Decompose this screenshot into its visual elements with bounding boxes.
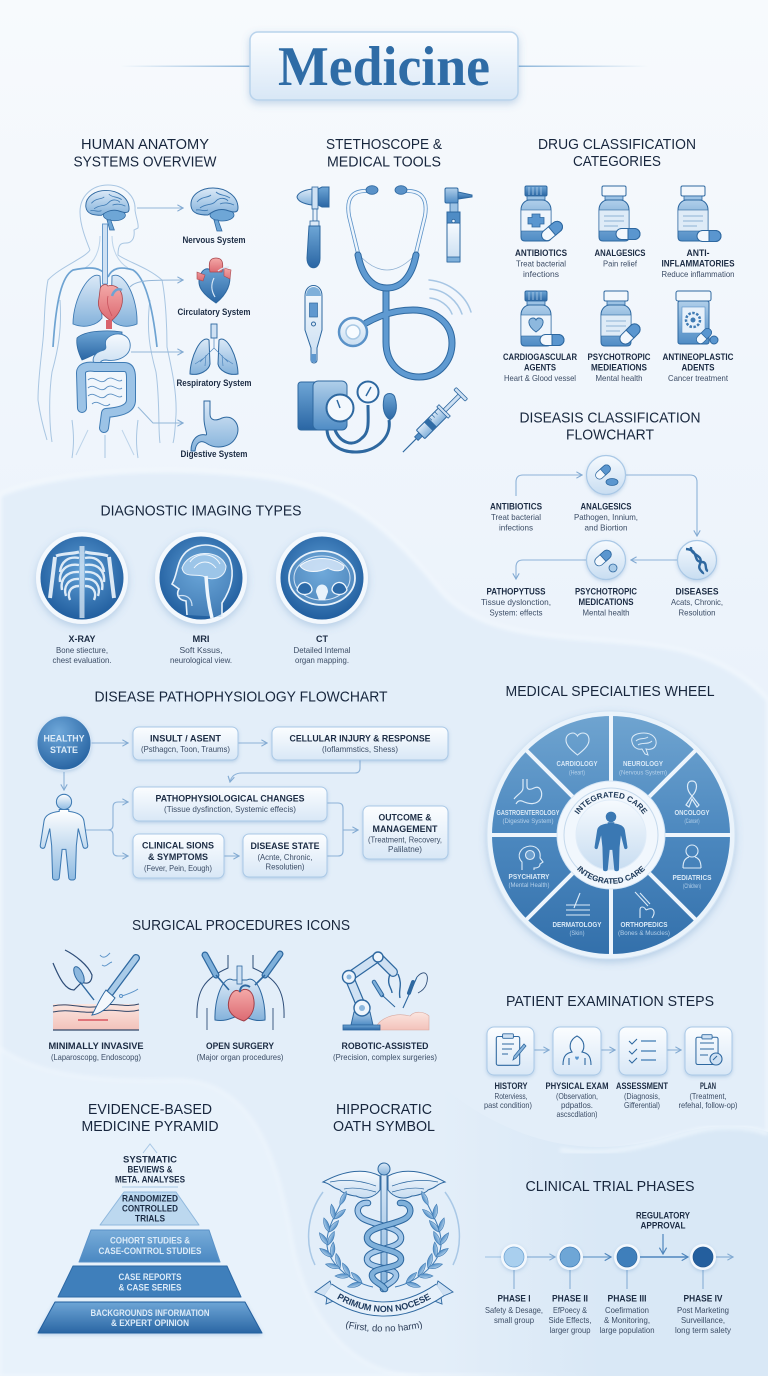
panel: hippocratic oath — [308, 1101, 460, 1332]
heading: disease classification: DISEASIS CLASSIFICATION — [520, 410, 700, 426]
icon: cardiovascular bottle — [521, 291, 564, 346]
wheel disc — [487, 711, 735, 959]
arrows: pathophysiology flow — [64, 743, 360, 856]
label: psychotropic: PSYCHOTROPIC — [575, 586, 638, 596]
label: psychotropic: Mental health — [582, 608, 630, 618]
box: disease state — [243, 834, 327, 877]
box: clinical signs: CLINICAL SIONS — [142, 840, 214, 852]
box: insult: INSULT / ASENT — [150, 734, 221, 744]
organ: colon — [81, 367, 131, 428]
label: history: Roterviess, — [494, 1091, 528, 1101]
label: phase IV: long term salety — [675, 1325, 732, 1335]
segment: pediatrics — [672, 845, 712, 890]
label: antineoplastic: Cancer treatment — [668, 373, 729, 383]
segment: gastroenterology: GASTROENTEROLOGY — [496, 808, 560, 817]
box: outcome: Palilatne) — [388, 844, 422, 854]
label: diseases: DISEASES — [676, 586, 719, 596]
card: assessment — [619, 1027, 667, 1075]
heading: pyramid: MEDICINE PYRAMID — [82, 1118, 219, 1135]
symbol: serpents — [358, 1203, 410, 1289]
panel: human anatomy — [38, 136, 252, 459]
label: physical exam: ascscdlation) — [556, 1109, 598, 1119]
pyramid level: randomized trials: CONTROLLED — [122, 1204, 178, 1214]
icon: thermometer — [305, 286, 322, 363]
label: robotic assisted: (Precision, complex surgeries) — [333, 1052, 437, 1062]
label: pathophysiology: PATHOPYTUSS — [486, 586, 546, 596]
arrows: anatomy — [130, 208, 183, 423]
box: clinical signs — [133, 834, 224, 878]
panel: surgical procedures — [48, 917, 437, 1062]
label: antibiotics: ANTIBIOTICS — [515, 248, 567, 258]
label: circulatory: Circulatory System — [178, 307, 251, 317]
node: healthy state: HEALTHY — [44, 734, 85, 744]
box: disease state: DISEASE STATE — [250, 841, 320, 852]
icon: ct — [276, 532, 368, 624]
label: phase II: PHASE II — [552, 1294, 588, 1304]
label: anti-inflammatories: INFLAMMATORIES — [662, 258, 735, 268]
label: phase III: large population — [600, 1325, 655, 1335]
symbol: left laurel — [318, 1190, 373, 1289]
heading: disease classification: FLOWCHART — [566, 426, 654, 444]
box: outcome: MANAGEMENT — [372, 824, 438, 835]
label: open surgery: OPEN SURGERY — [206, 1041, 274, 1051]
organ: small intestine — [88, 378, 122, 406]
icon: pill node — [586, 540, 626, 580]
icon: sound waves — [429, 280, 471, 314]
box: pathophysiological changes: PATHOPHYSIOLOGICAL CHANGES — [156, 794, 304, 804]
symbol: right laurel — [395, 1190, 450, 1289]
icon: antineoplastic bottle — [676, 291, 718, 345]
label: cardiovascular: Heart & Glood vessel — [504, 373, 576, 383]
label: phase II: Side Effects, — [548, 1315, 592, 1325]
label: psychotropic: Mental health — [596, 373, 643, 383]
label: plan: PLAN — [700, 1081, 716, 1091]
label: phase III: PHASE III — [608, 1294, 646, 1304]
heading: trials: CLINICAL TRIAL PHASES — [526, 1178, 694, 1195]
box: clinical signs: (Fever, Pein, Eough) — [144, 863, 212, 873]
label: digestive: Digestive System — [180, 449, 248, 459]
box: cellular injury: (Ioflammstics, Shess) — [322, 744, 398, 754]
symbol: outer arcs — [309, 1192, 459, 1265]
segment: neurology: NEUROLOGY — [623, 759, 663, 768]
heading: examination: PATIENT EXAMINATION STEPS — [506, 993, 714, 1010]
label: ct: organ mapping. — [295, 655, 349, 665]
icon: syringe — [397, 387, 468, 458]
node: healthy state — [37, 716, 91, 770]
heading: surgical: SURGICAL PROCEDURES ICONS — [132, 917, 350, 934]
label: pathophysiology: System: effects — [490, 608, 542, 618]
pyramid level: case reports — [58, 1266, 241, 1297]
label: analgesics: ANALGESICS — [594, 248, 646, 258]
label: mri: MRI — [192, 634, 210, 644]
icon: analgesics bottle — [599, 186, 640, 241]
title banner — [120, 32, 648, 100]
organ: body heart — [98, 285, 122, 329]
pyramid apex — [115, 1144, 185, 1187]
box: cellular injury: CELLULAR INJURY & RESPONSE — [290, 734, 430, 744]
segment: dermatology — [552, 893, 602, 937]
label: x-ray: chest evaluation. — [52, 655, 112, 665]
symbol: staff — [378, 1163, 390, 1290]
label: diseases: Acats, Chronic, — [671, 597, 723, 607]
center text: integrated care: INTEGRATED CARE — [574, 792, 648, 814]
label: minimally invasive: (Laparoscopg, Endoscopg) — [51, 1052, 141, 1062]
label: anti-inflammatories: Reduce inflammation — [662, 269, 735, 279]
label: phase III: & Monitoring, — [604, 1315, 650, 1325]
icon: respiratory lungs — [190, 324, 238, 374]
label: regulatory approval: APPROVAL — [640, 1220, 686, 1230]
pyramid apex: SYSTMATIC — [123, 1154, 178, 1164]
panel: stethoscope and tools — [297, 136, 472, 458]
node: phase IV — [690, 1244, 716, 1270]
pyramid level: cohort studies: COHORT STUDIES & — [110, 1236, 191, 1246]
segment: cardiology — [556, 733, 598, 776]
label: analgesics: and Biortion — [584, 522, 628, 532]
timeline arrows — [485, 1257, 733, 1289]
icon: circulatory heart — [197, 258, 231, 303]
organ: body lungs — [73, 275, 137, 326]
label: analgesics: Pathogen, Innium, — [574, 512, 638, 522]
box: insult: (Psthagcn, Toon, Traums) — [141, 744, 230, 754]
label: assessment: Gifferential) — [624, 1100, 660, 1110]
segment: dermatology: DERMATOLOGY — [552, 920, 602, 929]
label: antibiotics: infections — [499, 522, 533, 532]
heading: anatomy: HUMAN ANATOMY — [81, 136, 209, 153]
label: assessment: ASSESSMENT — [616, 1081, 669, 1091]
label: antibiotics: Treat bacterial — [516, 258, 566, 268]
label: diseases: Resolution — [678, 608, 716, 618]
center person — [594, 812, 628, 871]
label: phase IV: PHASE IV — [684, 1294, 723, 1304]
label: ct: CT — [316, 634, 329, 644]
heading: pathophysiology: DISEASE PATHOPHYSIOLOGY FLOWCHART — [94, 688, 388, 706]
icon: antibiotics bottle — [521, 186, 565, 243]
center text lower: integrated care: INTEGRATED CARE — [577, 866, 646, 884]
label: phase II: EfPoecy & — [553, 1305, 587, 1315]
pyramid level: case reports: CASE REPORTS — [118, 1272, 182, 1282]
pyramid level: randomized trials — [100, 1192, 199, 1225]
pyramid level: randomized trials: RANDOMIZED — [122, 1194, 178, 1204]
panel: diagnostic imaging — [36, 502, 368, 665]
label: history: HISTORY — [494, 1081, 528, 1091]
heading: anatomy: SYSTEMS OVERVIEW — [74, 154, 217, 170]
icon: otoscope — [445, 188, 472, 262]
label: physical exam: pdpatlos. — [561, 1100, 593, 1110]
segment: gastroenterology — [496, 779, 560, 825]
segment: dermatology: (Skin) — [570, 930, 584, 937]
organ: stomach — [93, 334, 130, 369]
card: physical exam — [553, 1027, 601, 1075]
arrows: classification flow — [516, 475, 697, 579]
label: nervous: Nervous System — [182, 235, 246, 245]
label: anti-inflammatories: ANTI- — [686, 248, 710, 258]
ribbon text: PRIMUM NON NOCESE — [337, 1293, 431, 1312]
panel: patient examination — [484, 993, 738, 1119]
box: disease state: Resolutien) — [266, 862, 305, 872]
segment: gastroenterology: (Digestive System) — [502, 818, 554, 825]
organ: body brain — [86, 190, 129, 230]
label: x-ray: X-RAY — [68, 634, 96, 644]
box: cellular injury — [272, 727, 448, 760]
icon: reflex hammer — [297, 187, 329, 268]
label: antibiotics: Treat bacterial — [491, 512, 541, 522]
label: cardiovascular: CARDIOGASCULAR — [503, 352, 578, 362]
symbol: ribbon — [315, 1281, 453, 1309]
label: psychotropic: MEDICATIONS — [578, 597, 634, 607]
label: psychotropic: PSYCHOTROPIC — [588, 352, 651, 362]
label: respiratory: Respiratory System — [176, 378, 252, 388]
heading: drugs: DRUG CLASSIFICATION — [538, 136, 696, 153]
icon: mri — [155, 532, 247, 624]
label: phase II: larger group — [550, 1325, 591, 1335]
body outline — [38, 185, 176, 458]
box: outcome: (Treatment, Recovery, — [368, 834, 442, 844]
pyramid level: cohort studies — [79, 1230, 220, 1262]
label: phase I: PHASE I — [498, 1294, 530, 1304]
card: plan — [685, 1027, 732, 1075]
pyramid level: background information: BACKGROUNDS INFORMATION — [90, 1308, 210, 1318]
segment: oncology — [674, 781, 710, 825]
heading: tools: STETHOSCOPE & — [326, 136, 442, 153]
label: physical exam: (Observation, — [556, 1091, 598, 1101]
panel: specialties wheel — [483, 683, 739, 966]
node: phase II — [557, 1244, 583, 1270]
icon: capsule node — [586, 456, 626, 494]
label: physical exam: PHYSICAL EXAM — [546, 1081, 608, 1091]
label: analgesics: ANALGESICS — [580, 502, 632, 512]
segment: orthopedics — [618, 892, 670, 937]
segment: psychiatry — [508, 846, 550, 889]
icon: blood pressure cuff — [298, 381, 396, 452]
pyramid level: case reports: & CASE SERIES — [118, 1282, 182, 1292]
label: mri: Soft Kssus, — [180, 645, 222, 655]
heading: imaging: DIAGNOSTIC IMAGING TYPES — [100, 502, 302, 520]
organ: spinal cord — [102, 224, 108, 284]
label: ct: Detailed Intemal — [294, 645, 351, 655]
label: phase III: Coefirmation — [605, 1305, 649, 1315]
box: pathophysiological changes: (Tissue dysfinction, Systemic effecis) — [164, 804, 296, 814]
box: outcome: OUTCOME & — [378, 812, 432, 824]
pyramid level: randomized trials: TRIALS — [135, 1214, 165, 1224]
arrow: approval — [662, 1234, 664, 1254]
segment: oncology: ONCOLOGY — [674, 808, 710, 817]
icon: psychotropic bottle — [601, 291, 642, 346]
label: minimally invasive: MINIMALLY INVASIVE — [48, 1041, 144, 1051]
label: antibiotics: infections — [523, 269, 559, 279]
heading: pyramid: EVIDENCE-BASED — [88, 1101, 212, 1118]
title banner: Medicine — [278, 36, 490, 98]
icon: x-ray — [36, 532, 128, 624]
label: phase IV: Surveillance, — [681, 1315, 725, 1325]
label: history: past condition) — [484, 1100, 532, 1110]
icon: dna node — [678, 540, 716, 580]
organ: liver — [77, 331, 122, 360]
icon: stethoscope — [339, 186, 452, 377]
label: plan: refehal, follow-op) — [678, 1100, 738, 1110]
heading: hippocratic: OATH SYMBOL — [333, 1118, 435, 1135]
label: phase I: Safety & Desage, — [485, 1305, 543, 1315]
card: history — [487, 1027, 534, 1075]
icon: nervous system — [191, 188, 238, 231]
label: regulatory approval: REGULATORY — [636, 1210, 690, 1220]
segment: oncology: (Cancer) — [684, 818, 700, 825]
segment: orthopedics: (Bones & Muscles) — [618, 930, 670, 937]
heading: tools: MEDICAL TOOLS — [327, 154, 441, 170]
panel: evidence pyramid — [38, 1101, 262, 1333]
box: outcome — [363, 806, 448, 859]
panel: clinical trial phases — [485, 1178, 733, 1335]
heading: drugs: CATEGORIES — [573, 153, 661, 170]
label: plan: (Treatment, — [690, 1091, 726, 1101]
segment: psychiatry: PSYCHIATRY — [508, 872, 550, 881]
segment: orthopedics: ORTHOPEDICS — [620, 920, 668, 929]
box: pathophysiological changes — [133, 787, 327, 821]
icon: open surgery — [197, 954, 284, 1030]
node: phase I — [501, 1244, 527, 1270]
segment: cardiology: (Heart) — [569, 770, 585, 776]
label: phase IV: Post Marketing — [677, 1305, 729, 1315]
label: analgesics: Pain relief — [603, 258, 638, 268]
panel: drug classification — [503, 136, 735, 383]
heading: wheel: MEDICAL SPECIALTIES WHEEL — [506, 683, 714, 700]
label: pathophysiology: Tissue dyslonction, — [481, 597, 551, 607]
label: antineoplastic: ANTINEOPLASTIC — [662, 352, 734, 362]
label: antineoplastic: ADENTS — [682, 362, 715, 372]
segment: psychiatry: (Mental Health) — [508, 882, 550, 889]
panel: disease classification flowchart — [481, 410, 723, 618]
box: clinical signs: & SYMPTOMS — [148, 852, 208, 863]
label: robotic assisted: ROBOTIC-ASSISTED — [342, 1041, 428, 1051]
icon: person outline — [40, 794, 88, 880]
caption: first do no harm: (First, do no harm) — [346, 1321, 422, 1332]
segment: pediatrics: (Children) — [683, 883, 701, 890]
segment: pediatrics: PEDIATRICS — [672, 873, 712, 882]
arrows: examination flow — [534, 1049, 681, 1051]
pyramid apex: META. ANALYSES — [115, 1174, 185, 1184]
label: phase I: small group — [494, 1315, 534, 1325]
label: psychotropic: MEDIEATIONS — [591, 362, 647, 372]
pyramid level: background information: & EXPERT OPINION — [111, 1318, 189, 1328]
heading: hippocratic: HIPPOCRATIC — [336, 1101, 432, 1118]
icon: robotic assisted — [342, 952, 429, 1030]
node: healthy state: STATE — [50, 745, 78, 755]
node: phase III — [614, 1244, 640, 1270]
box: disease state: (Acnte, Chronic, — [258, 852, 312, 862]
label: mri: neurological view. — [170, 655, 232, 665]
segment: neurology: (Nervous System) — [619, 770, 667, 776]
organ: vessels — [53, 268, 157, 347]
panel: pathophysiology flowchart — [37, 688, 448, 880]
label: cardiovascular: AGENTS — [524, 362, 556, 372]
icon: digestive stomach — [191, 401, 238, 451]
label: assessment: (Diagnosis, — [624, 1091, 660, 1101]
segment: neurology — [619, 733, 667, 776]
icon: minimally invasive — [53, 950, 139, 1030]
segment: cardiology: CARDIOLOGY — [556, 759, 598, 768]
label: x-ray: Bone stiecture, — [56, 645, 108, 655]
pyramid level: cohort studies: CASE-CONTROL STUDIES — [98, 1246, 202, 1256]
icon: anti-inflammatory bottle — [678, 186, 721, 242]
box: insult — [133, 727, 238, 760]
pyramid apex: BEVIEWS & — [128, 1164, 173, 1174]
symbol: wings — [323, 1171, 445, 1198]
label: antibiotics: ANTIBIOTICS — [490, 502, 542, 512]
pyramid level: background information — [38, 1302, 262, 1333]
label: open surgery: (Major organ procedures) — [196, 1052, 284, 1062]
